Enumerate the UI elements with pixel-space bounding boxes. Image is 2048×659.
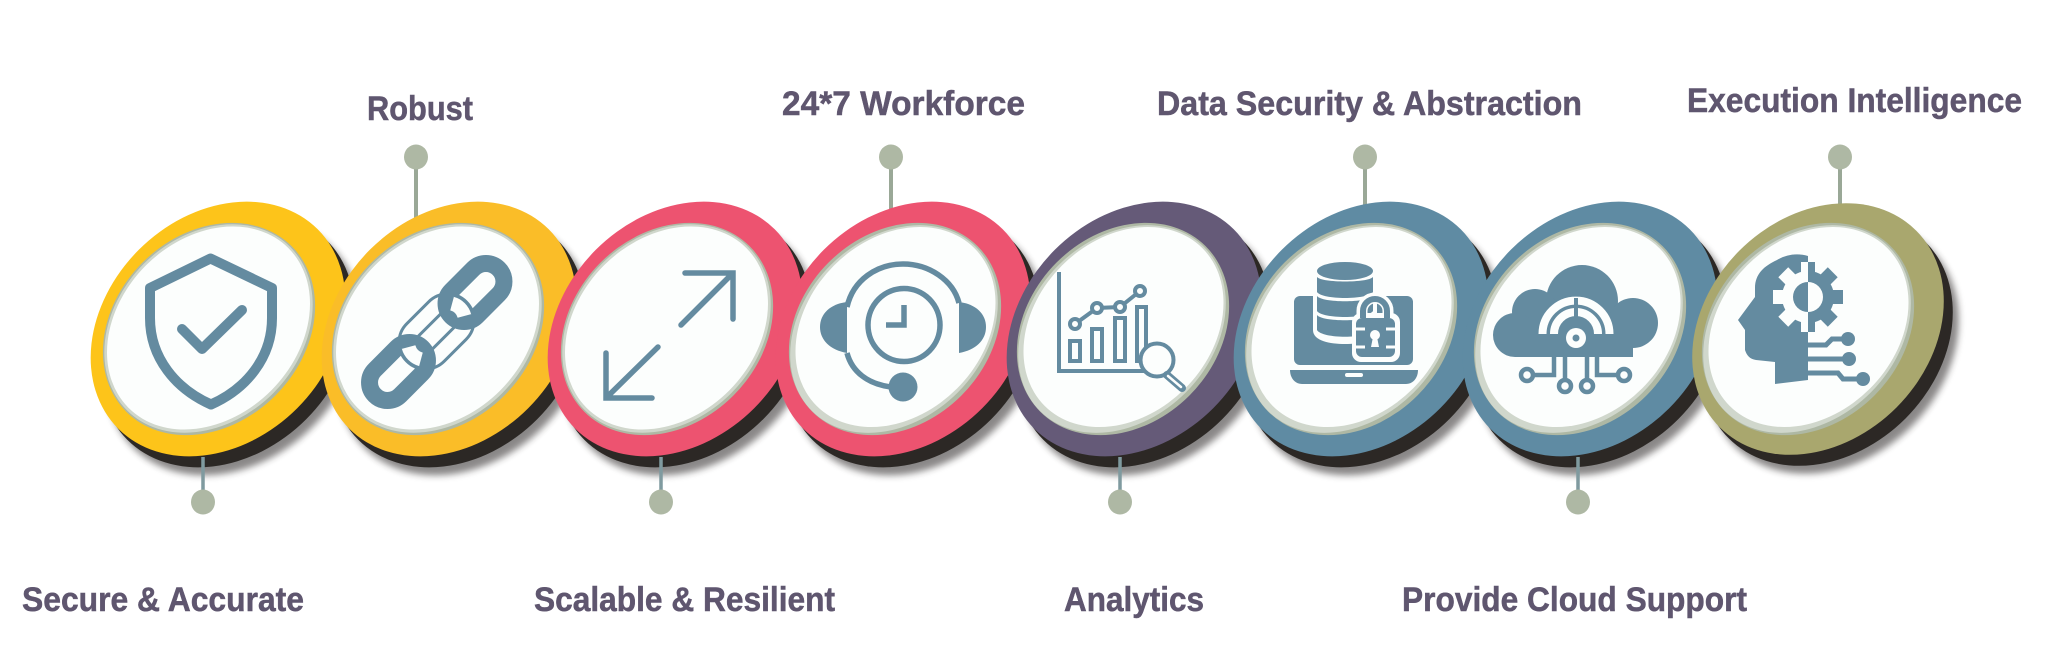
label: Analytics: Analytics <box>1064 581 1204 619</box>
icon: cloud with wireless and circuit lines <box>1493 265 1658 392</box>
panel: provide cloud support disc <box>1411 150 1784 527</box>
label: Execution Intelligence: Execution Intelligence <box>1687 82 2022 120</box>
label: 24*7 Workforce: 24*7 Workforce <box>782 85 1025 123</box>
icon: chain links <box>362 256 511 408</box>
top pins <box>404 144 1852 222</box>
icon: head with gear and circuit <box>1738 254 1870 386</box>
label: Data Security & Abstraction: Data Security & Abstraction <box>1157 85 1582 123</box>
panel: analytics disc <box>955 150 1328 527</box>
panel: 24*7 workforce disc <box>724 150 1097 527</box>
icon: laptop with database and lock <box>1290 262 1418 384</box>
label: Robust: Robust <box>367 90 473 128</box>
panel: robust disc <box>270 150 643 527</box>
panel: secure and accurate disc <box>39 150 412 527</box>
panel: data security and abstraction disc <box>1182 150 1555 527</box>
panel: scalable and resilient disc <box>496 150 869 527</box>
panel: execution intelligence disc <box>1692 203 1964 478</box>
label: Provide Cloud Support: Provide Cloud Support <box>1402 581 1747 619</box>
icon: headset with clock <box>820 264 986 402</box>
bottom pins <box>191 457 1590 514</box>
label: Secure & Accurate: Secure & Accurate <box>22 581 304 619</box>
label: Scalable & Resilient: Scalable & Resilient <box>534 581 835 619</box>
icon: bar chart with magnifier <box>1059 272 1182 388</box>
icon: shield with check <box>150 258 272 404</box>
icon: diagonal expand arrows <box>606 273 733 398</box>
